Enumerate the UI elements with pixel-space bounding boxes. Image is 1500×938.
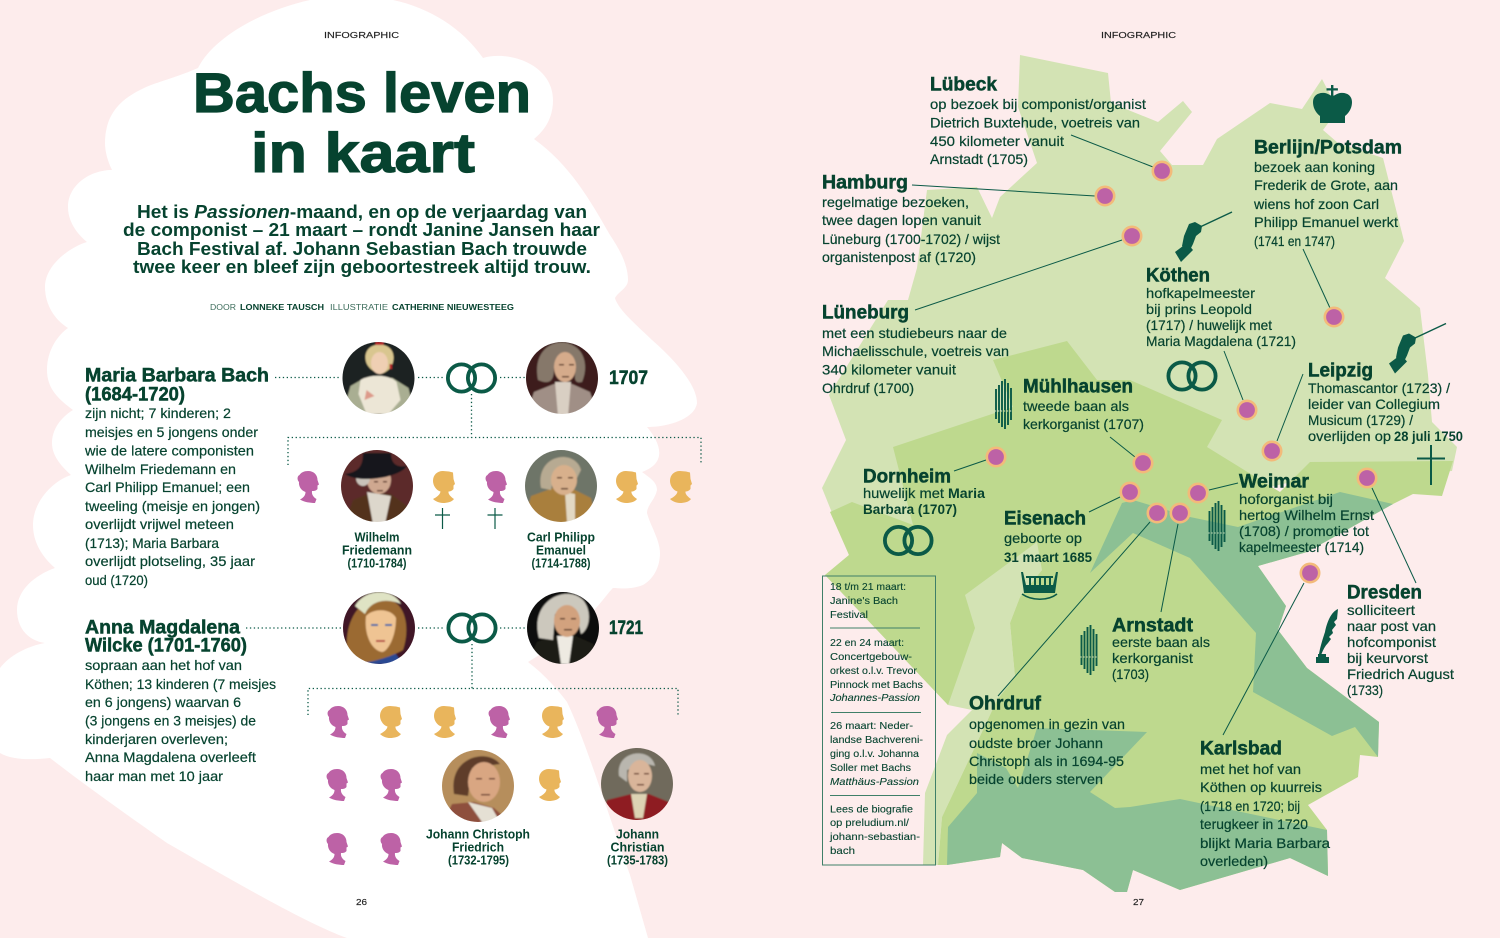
portrait: Carl Philipp Emanuel xyxy=(525,450,597,522)
text: Lübeck: 450 kilometer vanuit xyxy=(930,133,1064,149)
portrait: Johann Christian xyxy=(601,748,673,820)
text: Leipzig: Thomascantor (1723) / xyxy=(1308,380,1450,396)
text: Dresden: naar post van xyxy=(1347,618,1436,634)
text block: Maria Barbara Bach: wie de latere componisten xyxy=(84,442,254,458)
text: Leipzig: Musicum (1729) / xyxy=(1308,412,1413,428)
text: Mühlhausen xyxy=(1023,376,1144,432)
text block: Maria Barbara Bach: Maria Barbara Bach xyxy=(85,365,269,387)
text: Berlijn/Potsdam: (1741 en 1747) xyxy=(1254,233,1335,249)
portrait: old Bach xyxy=(527,592,599,664)
text: Ohrdruf: opgenomen in gezin van xyxy=(969,716,1125,732)
name: Johann Christian: Johann xyxy=(616,828,659,842)
text: Karlsbad: Köthen op kuurreis xyxy=(1200,779,1322,795)
text: Dresden: Friedrich August xyxy=(1347,666,1454,682)
name: Johann Christoph Friedrich: (1732-1795) xyxy=(448,854,509,868)
text: Berlijn/Potsdam: Philipp Emanuel werkt xyxy=(1254,214,1398,230)
text: Ohrdruf: oudste broer Johann xyxy=(969,735,1103,751)
sidebar entry: biography link xyxy=(829,804,921,857)
head silhouette in white xyxy=(0,0,697,938)
text: Dornheim: Maria xyxy=(948,485,985,501)
name: Carl Philipp Emanuel: Emanuel xyxy=(536,544,586,558)
text: Karlsbad: overleden) xyxy=(1200,853,1268,869)
text: Karlsbad: met het hof van xyxy=(1200,761,1301,777)
text: Berlijn/Potsdam: wiens hof zoon Carl xyxy=(1253,196,1379,212)
intro text xyxy=(123,202,600,277)
family tree connectors second marriage xyxy=(246,628,678,715)
text: Lübeck: Lübeck xyxy=(930,74,997,96)
silhouette boy with cross xyxy=(433,471,455,529)
name: Wilhelm Friedemann: Wilhelm xyxy=(354,531,400,545)
sidebar entry: Johannes-Passion: Johannes-Passion xyxy=(829,692,920,704)
byline: ILLUSTRATIE xyxy=(330,303,388,312)
sidebar entry: biography link: johann-sebastian- xyxy=(829,831,921,843)
text block: Maria Barbara Bach: (1713); Maria Barbara xyxy=(85,535,219,551)
text: Lübeck: op bezoek bij componist/organist xyxy=(930,96,1146,112)
name: Johann Christoph Friedrich: Johann Christoph xyxy=(426,828,530,842)
sidebar entry: Matthäus-Passion: Matthäus-Passion xyxy=(830,776,919,788)
text block: Anna Magdalena Wilcke: haar man met 10 jaar xyxy=(85,768,223,784)
text: Mühlhausen: kerkorganist (1707) xyxy=(1023,416,1144,432)
text block: Anna Magdalena Wilcke: (3 jongens en 3 meisjes) de xyxy=(85,712,256,728)
page number left: 26 xyxy=(356,897,367,907)
silhouette row two xyxy=(327,769,561,801)
portrait: Maria Barbara xyxy=(342,342,414,414)
text: Ohrdruf xyxy=(969,693,1125,787)
icon: cradle xyxy=(1021,572,1058,599)
children row first marriage xyxy=(298,448,692,529)
text: Dresden xyxy=(1347,582,1454,698)
sidebar entry: Johannes-Passion: 22 en 24 maart: xyxy=(830,637,904,649)
text: Leipzig: Leipzig xyxy=(1308,360,1373,382)
year 1707: 1707 xyxy=(609,367,648,389)
map region: centre and south, mid green xyxy=(825,341,1453,892)
text: Eisenach: 31 maart 1685 xyxy=(1004,549,1092,565)
text: Weimar: hertog Wilhelm Ernst xyxy=(1239,507,1374,523)
text block: Anna Magdalena Wilcke xyxy=(85,617,276,784)
byline: CATHERINE NIEUWESTEEG xyxy=(392,303,514,312)
text: Weimar: Weimar xyxy=(1239,471,1309,493)
text: Köthen: Maria Magdalena (1721) xyxy=(1146,333,1296,349)
sidebar entry: Matthäus-Passion: ging o.l.v. Johanna xyxy=(830,748,919,760)
text: Lüneburg: Ohrdruf (1700) xyxy=(822,380,914,396)
text: Karlsbad: Karlsbad xyxy=(1200,738,1282,760)
silhouette row one xyxy=(328,706,618,738)
icon: wedding rings 1721 xyxy=(448,614,496,642)
text: Lüneburg: met een studiebeurs naar de xyxy=(822,325,1007,341)
intro text: de componist – 21 maart – rondt Janine Jansen haar xyxy=(123,220,600,240)
map region: southern block, dark green xyxy=(947,728,1328,892)
name: Johann Christoph Friedrich: Friedrich xyxy=(452,841,504,855)
text block: Anna Magdalena Wilcke: Anna Magdalena overleeft xyxy=(85,749,256,765)
text: Köthen: hofkapelmeester xyxy=(1146,285,1255,301)
name: Carl Philipp Emanuel: (1714-1788) xyxy=(532,557,590,571)
text: Köthen: (1717) / huwelijk met xyxy=(1146,317,1272,333)
text: Lübeck xyxy=(930,74,1146,167)
silhouette boy xyxy=(616,471,638,503)
text: Karlsbad xyxy=(1200,738,1330,869)
text: Weimar: (1708) / promotie tot xyxy=(1239,523,1369,539)
text: Eisenach: Eisenach xyxy=(1004,508,1086,530)
text block: Maria Barbara Bach xyxy=(84,365,269,588)
text: Ohrdruf: Ohrdruf xyxy=(969,693,1041,715)
text: Dornheim: Barbara (1707) xyxy=(863,501,957,517)
text: Weimar: kapelmeester (1714) xyxy=(1239,539,1364,555)
text: Berlijn/Potsdam: bezoek aan koning xyxy=(1254,159,1375,175)
silhouette boy xyxy=(670,471,692,503)
map of Germany xyxy=(822,55,1457,892)
text: Lüneburg: Lüneburg xyxy=(822,302,909,324)
text: Dresden: bij keurvorst xyxy=(1347,650,1428,666)
text: Hamburg: Hamburg xyxy=(822,172,908,194)
children grid second marriage xyxy=(327,706,675,865)
text: Ohrdruf: Christoph als in 1694-95 xyxy=(969,753,1124,769)
text: Köthen: bij prins Leopold xyxy=(1146,301,1252,317)
name: Wilhelm Friedemann: Friedemann xyxy=(342,544,412,558)
text block: Maria Barbara Bach: meisjes en 5 jongens onder xyxy=(85,424,258,440)
sidebar entry: biography link: op preludium.nl/ xyxy=(830,817,909,829)
text: Hamburg xyxy=(822,172,1000,265)
text: Leipzig xyxy=(1308,360,1463,444)
section label left: INFOGRAPHIC xyxy=(324,30,399,40)
text block: Maria Barbara Bach: tweeling (meisje en jongen) xyxy=(85,498,260,514)
text: Leipzig: leider van Collegium xyxy=(1308,396,1440,412)
text: Berlijn/Potsdam xyxy=(1253,137,1402,249)
text: Berlijn/Potsdam: Berlijn/Potsdam xyxy=(1254,137,1402,159)
sidebar entry: Johannes-Passion: orkest o.l.v. Trevor xyxy=(830,665,917,677)
portrait: Wilhelm Friedemann xyxy=(341,450,413,522)
icon: rings Köthen xyxy=(1168,362,1216,390)
name: Johann Christian: Christian xyxy=(610,841,664,855)
sidebar entry: Janine's Bach Festival: Janine's Bach xyxy=(830,595,898,607)
name: Carl Philipp Emanuel: Carl Philipp xyxy=(527,531,595,545)
sidebar entry: Janine's Bach Festival: Festival xyxy=(830,609,868,621)
icon: conductor hand Köthen xyxy=(1175,212,1232,262)
text block: Anna Magdalena Wilcke: Köthen; 13 kinderen (7 meisjes xyxy=(85,676,276,692)
text: Hamburg: organistenpost af (1720) xyxy=(822,249,976,265)
text: Dresden: hofcomponist xyxy=(1347,634,1436,650)
icon: organ Arnstadt xyxy=(1080,625,1098,675)
text block: Anna Magdalena Wilcke: sopraan aan het hof van xyxy=(85,657,242,673)
silhouette row three xyxy=(327,833,402,865)
sidebar entry: Johannes-Passion: Concertgebouw- xyxy=(830,651,913,663)
text: Köthen: Köthen xyxy=(1146,265,1210,287)
name: Johann Christian xyxy=(607,828,668,868)
silhouette girl xyxy=(298,471,319,503)
text block: Anna Magdalena Wilcke: Wilcke (1701-1760) xyxy=(85,635,247,657)
byline: LONNEKE TAUSCH xyxy=(240,303,324,312)
icon: crown xyxy=(1313,85,1352,123)
sidebar entry: biography link: Lees de biografie xyxy=(830,804,913,816)
text block: Maria Barbara Bach: overlijdt plotseling, 35 jaar xyxy=(85,553,255,569)
text block: Maria Barbara Bach: overlijdt vrijwel meteen xyxy=(85,516,234,532)
text: Leipzig: 28 juli 1750 xyxy=(1394,428,1463,444)
text: Hamburg: regelmatige bezoeken, xyxy=(822,194,969,210)
text: Lübeck: Arnstadt (1705) xyxy=(930,151,1028,167)
section label right: INFOGRAPHIC xyxy=(1101,30,1176,40)
text: Dornheim xyxy=(863,466,985,517)
text: Weimar: hoforganist bij xyxy=(1239,491,1333,507)
sidebar entry: Janine's Bach Festival xyxy=(830,581,906,621)
text block: Anna Magdalena Wilcke: kinderjaren overleven; xyxy=(85,731,228,747)
family tree connectors first marriage xyxy=(275,378,701,465)
text: Arnstadt: eerste baan als xyxy=(1112,634,1210,650)
text: Arnstadt xyxy=(1112,615,1210,682)
portrait: young Bach xyxy=(526,342,598,414)
text: Arnstadt: Arnstadt xyxy=(1112,615,1194,637)
text block: Maria Barbara Bach: (1684-1720) xyxy=(85,384,185,406)
text: Lüneburg xyxy=(822,302,1009,396)
icon: quill and inkwell xyxy=(1316,609,1338,663)
sidebar entry: Matthäus-Passion: landse Bachvereni- xyxy=(830,734,924,746)
sidebar entry: biography link: bach xyxy=(830,845,855,857)
text: Leipzig: overlijden op xyxy=(1308,428,1391,444)
intro text: twee keer en bleef zijn geboortestreek altijd trouw. xyxy=(133,257,591,277)
text: Karlsbad: blijkt Maria Barbara xyxy=(1200,835,1330,851)
text block: Maria Barbara Bach: zijn nicht; 7 kinderen; 2 xyxy=(85,405,231,421)
name: Carl Philipp Emanuel xyxy=(527,531,595,571)
icon: rings Dornheim xyxy=(885,527,932,554)
name: Wilhelm Friedemann: (1710-1784) xyxy=(348,557,406,571)
text: Dornheim: Dornheim xyxy=(863,466,951,488)
text: Lüneburg: Michaelisschule, voetreis van xyxy=(822,343,1009,359)
text: Dornheim: huwelijk met xyxy=(863,485,944,501)
icon: cross Leipzig xyxy=(1417,445,1445,485)
name: Wilhelm Friedemann xyxy=(342,531,412,571)
map region: north, light green xyxy=(822,55,1457,865)
portrait: Johann Christoph Friedrich xyxy=(442,750,514,822)
text: Arnstadt: (1703) xyxy=(1112,666,1149,682)
text: Eisenach: geboorte op xyxy=(1004,530,1082,546)
page number right: 27 xyxy=(1133,897,1144,907)
text: Lübeck: Dietrich Buxtehude, voetreis van xyxy=(930,114,1140,130)
text: Mühlhausen: Mühlhausen xyxy=(1023,376,1133,398)
icon: organ Mühlhausen xyxy=(995,379,1012,429)
portrait: Anna Magdalena xyxy=(343,592,415,664)
icon: wedding rings 1707 xyxy=(448,364,495,392)
sidebar entry: Johannes-Passion: Pinnock met Bachs xyxy=(830,679,923,691)
text: Karlsbad: (1718 en 1720; bij xyxy=(1200,798,1300,814)
map pins xyxy=(987,162,1376,582)
sidebar: festival programme xyxy=(822,576,936,865)
text block: Anna Magdalena Wilcke: Anna Magdalena xyxy=(85,617,240,639)
text: Karlsbad: terugkeer in 1720 xyxy=(1200,816,1308,832)
year 1721: 1721 xyxy=(609,617,643,639)
text: Arnstadt: kerkorganist xyxy=(1112,650,1193,666)
leader lines xyxy=(912,135,1416,735)
text: Weimar xyxy=(1239,471,1374,555)
text: Eisenach xyxy=(1004,508,1092,565)
map region: eastern band, dark green xyxy=(1090,492,1393,757)
text: Hamburg: Lüneburg (1700-1702) / wijst xyxy=(822,231,1000,247)
text block: Maria Barbara Bach: oud (1720) xyxy=(85,572,148,588)
intro text: Het is Passionen -maand, en op de verjaardag van xyxy=(137,202,587,222)
text: Lüneburg: 340 kilometer vanuit xyxy=(822,362,956,378)
text block: Anna Magdalena Wilcke: en 6 jongens) waarvan 6 xyxy=(85,694,241,710)
title: Bachs leven xyxy=(193,61,531,124)
text: Dresden: (1733) xyxy=(1347,682,1383,698)
text: Dresden: Dresden xyxy=(1347,582,1422,604)
sidebar entry: Matthäus-Passion xyxy=(830,720,924,788)
text: Dresden: solliciteert xyxy=(1347,602,1415,618)
sidebar entry: Matthäus-Passion: Soller met Bachs xyxy=(830,762,911,774)
name: Johann Christoph Friedrich xyxy=(426,828,530,868)
text block: Maria Barbara Bach: Carl Philipp Emanuel; een xyxy=(85,479,250,495)
title: in kaart xyxy=(251,121,475,184)
intro text: Bach Festival af. Johann Sebastian Bach trouwde xyxy=(137,239,587,259)
byline: DOOR xyxy=(210,303,236,312)
text: Ohrdruf: beide ouders sterven xyxy=(969,771,1103,787)
text block: Maria Barbara Bach: Wilhelm Friedemann en xyxy=(85,461,236,477)
icon: conductor hand Leipzig xyxy=(1389,324,1446,374)
silhouette girl with cross xyxy=(486,471,507,529)
name: Johann Christian: (1735-1783) xyxy=(607,854,668,868)
text: Berlijn/Potsdam: Frederik de Grote, aan xyxy=(1254,177,1398,193)
icon: organ Weimar xyxy=(1208,501,1226,551)
sidebar entry: Janine's Bach Festival: 18 t/m 21 maart: xyxy=(830,581,906,593)
sidebar entry: Matthäus-Passion: 26 maart: Neder- xyxy=(830,720,914,732)
sidebar entry: Johannes-Passion xyxy=(829,637,923,704)
text: Mühlhausen: tweede baan als xyxy=(1023,398,1129,414)
text: Köthen xyxy=(1146,265,1296,349)
byline xyxy=(210,303,514,312)
text: Hamburg: twee dagen lopen vanuit xyxy=(822,212,981,228)
title xyxy=(193,61,531,184)
